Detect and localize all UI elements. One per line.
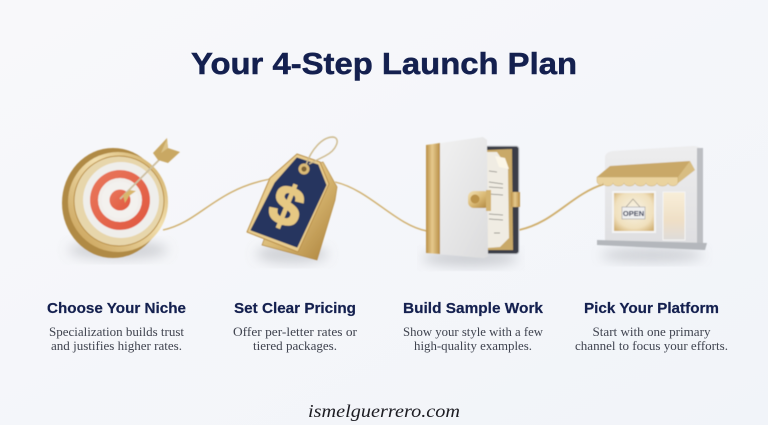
awning xyxy=(597,161,695,186)
icon: price tag xyxy=(247,137,337,263)
step 2 text: tiered packages. xyxy=(253,339,337,353)
icon: target with arrow xyxy=(62,138,180,259)
footer website: ismelguerrero.com xyxy=(308,401,460,421)
step 3 text: high-quality examples. xyxy=(414,339,532,353)
step 1 text: Specialization builds trust xyxy=(49,325,185,339)
step 4 text xyxy=(575,300,728,353)
icon: storefront xyxy=(597,146,707,262)
step 4 text: Start with one primary xyxy=(592,325,711,339)
document page xyxy=(487,149,513,250)
step 3 text: Show your style with a few xyxy=(403,325,543,339)
icon: portfolio book xyxy=(422,137,520,266)
arrow shaft and fletching xyxy=(120,138,180,203)
title: Your 4-Step Launch Plan xyxy=(191,46,577,81)
step 4 text: Pick Your Platform xyxy=(584,300,719,317)
door xyxy=(663,192,685,240)
step 1 text xyxy=(47,300,186,353)
base xyxy=(597,240,707,250)
dollar sign: $ xyxy=(261,170,313,241)
step 3 text xyxy=(403,300,544,353)
step 1 text: and justifies higher rates. xyxy=(51,339,182,353)
connector curves between steps xyxy=(163,179,604,231)
step 2 text: Offer per-letter rates or xyxy=(233,325,358,339)
step 4 text: channel to focus your efforts. xyxy=(575,339,728,353)
step 2 text: Set Clear Pricing xyxy=(234,300,356,317)
window with OPEN sign: OPEN xyxy=(623,209,644,218)
tag string xyxy=(306,137,337,165)
step 2 text xyxy=(233,300,358,353)
clasp xyxy=(468,191,490,208)
step 1 text: Choose Your Niche xyxy=(47,300,186,317)
step 3 text: Build Sample Work xyxy=(403,300,544,317)
